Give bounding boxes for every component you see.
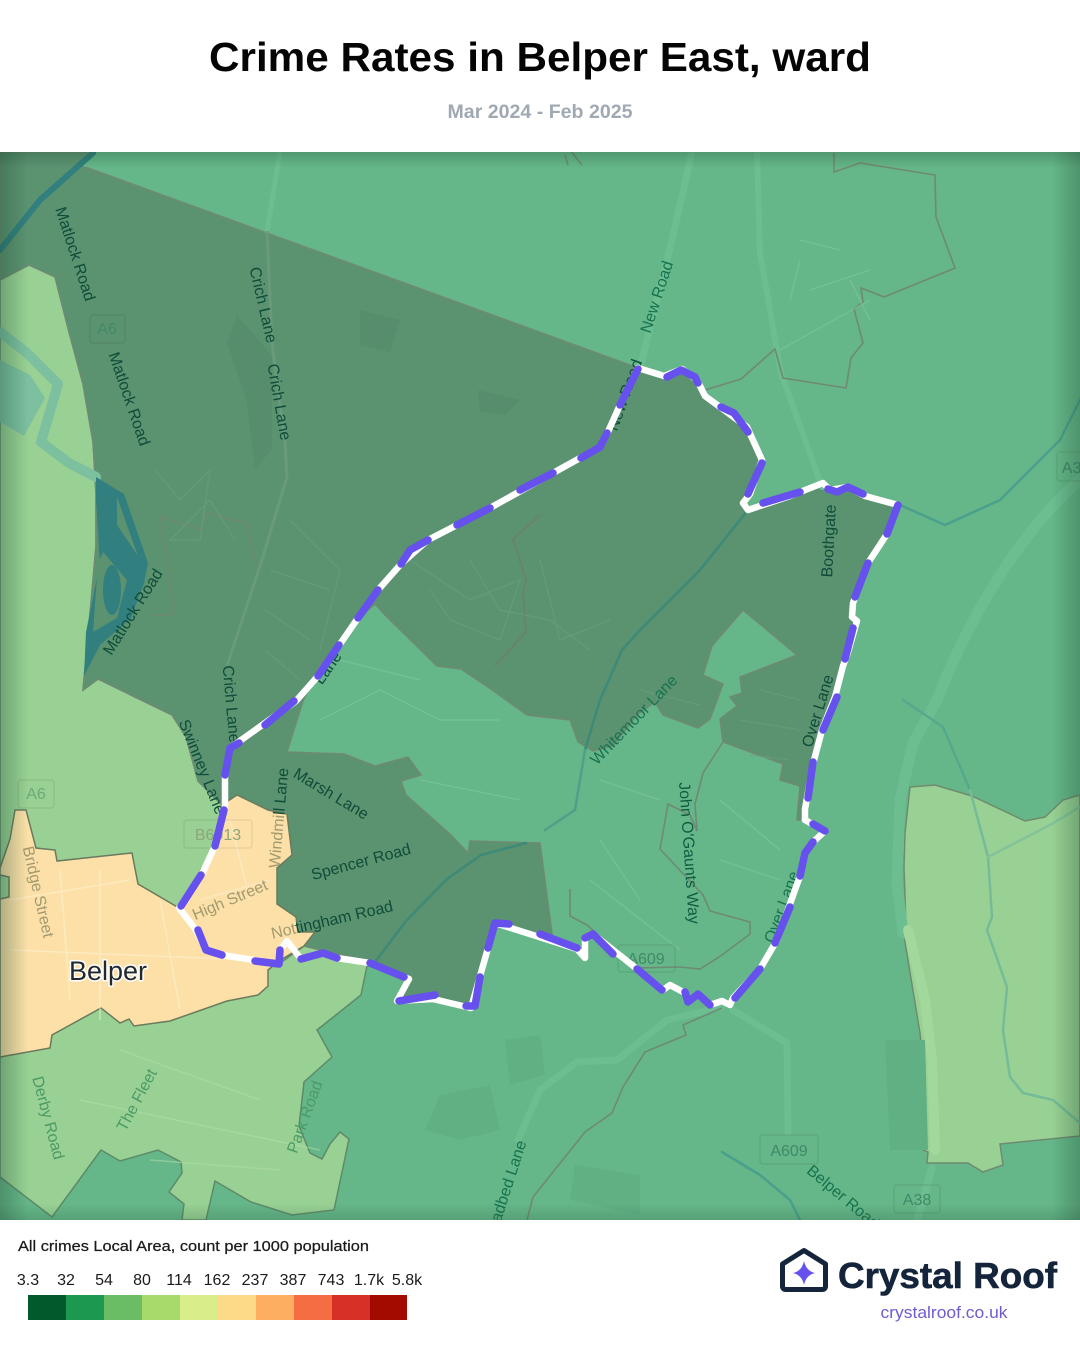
legend values: 114	[166, 1272, 192, 1289]
title: Crime Rates in Belper East, ward	[209, 34, 871, 80]
place label: Belper: Belper	[69, 956, 147, 986]
badge: A38 east	[1057, 452, 1080, 481]
road labels: Over Lane	[762, 869, 803, 945]
road labels: New Road	[605, 357, 646, 433]
river channel through the dark area	[84, 477, 148, 676]
lake	[0, 360, 45, 436]
legend title: All crimes Local Area, count per 1000 population	[18, 1238, 369, 1255]
legend values: 32	[57, 1272, 75, 1289]
road labels: Whitemoor Lane	[587, 672, 681, 768]
brand logo	[782, 1250, 1058, 1322]
date range subtitle: Mar 2024 - Feb 2025	[448, 102, 633, 123]
badge: B6013	[184, 820, 252, 848]
ward boundaries and residential streets	[151, 150, 955, 1220]
road labels: Matlock Road	[105, 350, 152, 448]
faint street texture	[10, 240, 870, 1170]
road labels: Over Lane	[799, 673, 838, 749]
road labels: Bridge Street	[19, 845, 56, 940]
darker woodland patches	[920, 1040, 928, 1150]
brand name: Crystal Roof	[838, 1255, 1058, 1296]
legend values: 237	[242, 1272, 268, 1289]
badge: A38: A38	[903, 1192, 931, 1209]
road labels: Windmill Lane	[267, 767, 292, 869]
rivers and streams	[0, 153, 1080, 1220]
road labels: The Fleet	[114, 1066, 161, 1134]
road labels: Belper Road	[803, 1162, 882, 1232]
badge: A6 north	[90, 315, 125, 343]
road labels: Lane	[311, 649, 346, 688]
brand url: crystalroof.co.uk	[880, 1304, 1008, 1322]
legend values: 387	[280, 1272, 306, 1289]
legend colour scale	[28, 1295, 407, 1320]
road labels: Broadbed Lane	[480, 1138, 530, 1248]
badge: A609 ward	[618, 945, 675, 972]
road labels: Matlock Road	[100, 566, 167, 658]
legend values: 80	[133, 1272, 151, 1289]
road labels: Matlock Road	[51, 205, 98, 303]
area: low-crime fields in the east	[903, 785, 1080, 1172]
legend values: 743	[318, 1272, 344, 1289]
badge: A6 north: A6	[97, 321, 117, 338]
road labels: High Street	[190, 877, 271, 924]
map edge vignette	[0, 152, 1080, 1220]
road labels: Boothgate	[819, 504, 840, 578]
road labels	[19, 205, 882, 1248]
badge: A609 south	[760, 1135, 818, 1164]
legend values: 3.3	[17, 1272, 39, 1289]
road labels: Swinney Lane	[175, 717, 228, 817]
icon: house with star	[782, 1250, 826, 1290]
legend values: 162	[204, 1272, 230, 1289]
area: west and south-west of Belper	[0, 265, 368, 1220]
legend values: 1.7k	[354, 1272, 385, 1289]
badge: A609 ward: A609	[627, 951, 665, 968]
road labels: Crich Lane	[219, 665, 242, 743]
badge: A609 south: A609	[770, 1143, 808, 1160]
badge: A38	[894, 1185, 940, 1213]
roads	[264, 232, 940, 1155]
road labels: Marsh Lane	[290, 765, 371, 824]
road labels: John O'Gaunts Way	[675, 782, 702, 924]
legend values: 5.8k	[392, 1272, 423, 1289]
road labels: Derby Road	[28, 1075, 67, 1162]
badge: A6 west: A6	[26, 786, 46, 803]
green ring around pond	[93, 552, 127, 632]
island pond	[103, 565, 121, 615]
road labels: Park Road	[285, 1079, 326, 1156]
area: Belper town centre	[0, 795, 315, 1057]
road badges	[18, 315, 1080, 1213]
road labels: Nottingham Road	[270, 898, 395, 943]
legend values	[17, 1272, 423, 1289]
road labels: Crich Lane	[263, 363, 294, 442]
road labels: New Road	[638, 259, 677, 335]
badge: A6 west	[18, 780, 54, 808]
area: darker north and central band	[0, 152, 898, 1008]
badge: B6013: B6013	[195, 827, 241, 844]
road labels: Crich Lane	[246, 266, 280, 345]
legend values: 54	[95, 1272, 113, 1289]
legend	[17, 1238, 423, 1320]
darker patches in north area	[227, 310, 520, 470]
river island	[117, 497, 138, 556]
road labels: Spencer Road	[310, 841, 413, 884]
ward outline: Belper East	[179, 368, 898, 1008]
